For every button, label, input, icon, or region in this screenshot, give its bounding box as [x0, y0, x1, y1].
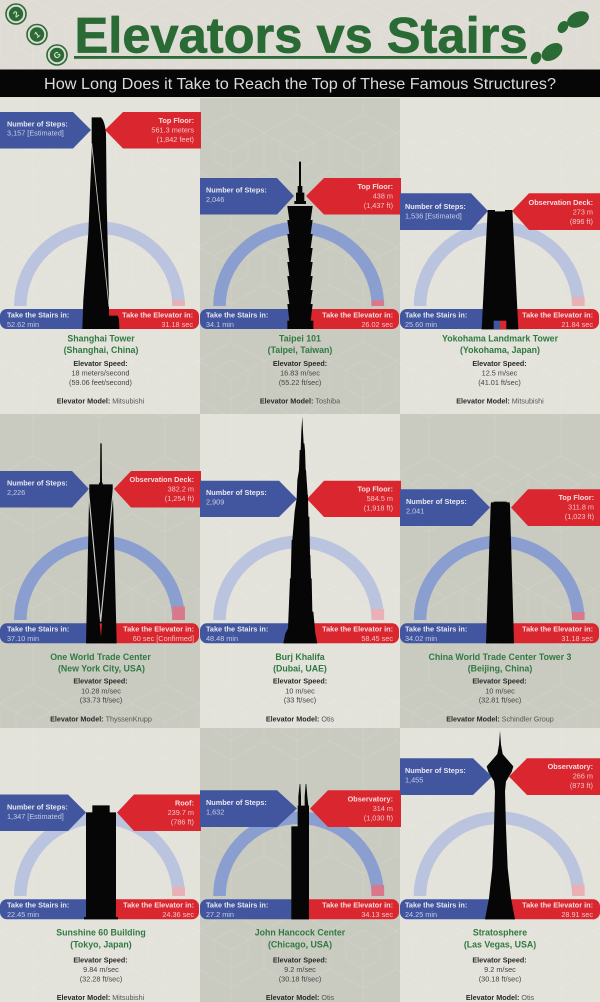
steps callout	[400, 489, 490, 526]
gauge arc	[20, 542, 179, 620]
elevator time bar: 28.91 sec	[561, 910, 593, 919]
stairs time bar	[400, 623, 500, 643]
elevator details: Elevator Speed:	[472, 955, 527, 964]
elevator time bar: Take the Elevator in:	[322, 624, 393, 634]
building name: (Beijing, China)	[468, 664, 532, 674]
building name	[429, 652, 572, 674]
elevator details: 16.83 m/sec	[280, 368, 320, 377]
elevator share of arc	[172, 887, 185, 896]
steps callout: 2,046	[206, 195, 224, 204]
height callout: (873 ft)	[570, 781, 593, 790]
elevator details	[266, 677, 335, 723]
elevator details: 10 m/sec	[285, 686, 315, 695]
elevator details: (59.06 feet/second)	[69, 378, 132, 387]
steps callout: Number of Steps:	[7, 802, 68, 812]
steps callout	[200, 481, 297, 517]
stairs time bar: Take the Stairs in:	[7, 624, 69, 634]
building name: (Tokyo, Japan)	[70, 940, 132, 950]
height callout: Roof:	[175, 798, 194, 808]
gauge arc	[420, 818, 578, 896]
panel: Taipei 101	[200, 162, 401, 406]
stairs time bar: Take the Stairs in:	[206, 900, 268, 910]
elevator details: (33 ft/sec)	[284, 696, 316, 705]
elevator details: Elevator Speed:	[273, 955, 327, 964]
building name: (New York City, USA)	[58, 664, 145, 674]
height callout: Top Floor:	[558, 493, 594, 502]
panel: Yokohama Landmark Tower	[400, 193, 600, 406]
elevator time bar	[100, 899, 199, 919]
elevator details: Elevator Model: Schindler Group	[446, 714, 554, 723]
steps callout: Number of Steps:	[406, 497, 467, 506]
stairs time bar: 22.45 min	[7, 910, 39, 919]
steps callout	[0, 794, 86, 831]
elevator details: 9.2 m/sec	[284, 965, 316, 974]
stairs time bar	[200, 309, 300, 329]
elevator time bar	[500, 623, 599, 643]
height callout: (786 ft)	[171, 818, 194, 826]
elevator time bar: Take the Elevator in:	[123, 624, 194, 634]
icon: floor buttons	[6, 4, 67, 65]
elevator details	[57, 359, 145, 406]
elevator time bar: 24.36 sec	[162, 910, 194, 919]
elevator details: Elevator Model: Otis	[466, 993, 535, 1002]
elevator details: Elevator Speed:	[73, 955, 128, 964]
building silhouette	[82, 117, 119, 329]
height callout	[509, 758, 600, 795]
building name: (Taipei, Taiwan)	[268, 345, 332, 355]
elevator details: 10.28 m/sec	[81, 686, 121, 695]
building silhouette	[485, 731, 515, 919]
icon: footprints	[529, 8, 592, 66]
building name: Yokohama Landmark Tower	[442, 334, 559, 344]
stairs time bar: 34.1 min	[206, 320, 234, 329]
title: Elevators vs Stairs	[74, 8, 528, 64]
steps callout: 1,347 [Estimated]	[7, 812, 64, 821]
stairs time bar: 27.2 min	[206, 910, 234, 919]
elevator details: Elevator Speed:	[273, 677, 327, 686]
height callout	[114, 471, 201, 508]
elevator share of arc	[172, 606, 185, 620]
building name: (Chicago, USA)	[268, 940, 332, 950]
elevator time bar: 60 sec [Confirmed]	[133, 634, 194, 643]
building name	[268, 334, 332, 355]
header background	[0, 0, 600, 100]
panel: China World Trade Center Tower 3	[400, 489, 600, 723]
height callout: (896 ft)	[570, 217, 593, 226]
elevator details: Elevator Speed:	[472, 359, 527, 368]
elevator details	[50, 677, 152, 723]
height callout	[512, 193, 600, 230]
steps callout	[200, 790, 297, 827]
stairs time bar: 37.10 min	[7, 634, 39, 643]
subtitle banner	[0, 70, 600, 97]
building name	[273, 652, 327, 674]
height callout	[117, 794, 201, 831]
building name: (Yokohama, Japan)	[460, 345, 540, 355]
steps callout	[200, 178, 294, 214]
stairs time bar: Take the Stairs in:	[206, 310, 268, 320]
elevator share of arc	[572, 297, 585, 306]
elevator details: Elevator Model: Toshiba	[260, 397, 340, 406]
elevator details: (55.22 ft/sec)	[279, 378, 321, 387]
height callout: Observation Deck:	[529, 198, 593, 207]
building name: Burj Khalifa	[275, 652, 325, 662]
elevator time bar: Take the Elevator in:	[522, 900, 593, 910]
elevator details	[57, 955, 145, 1002]
elevator time bar: 21.84 sec	[561, 320, 593, 329]
gauge arc	[420, 542, 578, 620]
elevator time bar: 34.13 sec	[361, 910, 393, 919]
building name: Stratosphere	[473, 928, 527, 938]
elevator details: Elevator Model: Otis	[266, 714, 335, 723]
elevator details: Elevator Speed:	[73, 359, 128, 368]
elevator details	[260, 359, 340, 406]
icon: floor buttons: 1	[32, 29, 42, 40]
panel: Sunshine 60 Building	[0, 794, 201, 1002]
elevator time bar: Take the Elevator in:	[123, 900, 194, 910]
stairs time bar: 52.62 min	[7, 320, 39, 329]
gauge arc	[220, 542, 378, 620]
height callout	[307, 481, 401, 517]
elevator details	[466, 955, 535, 1002]
stairs time bar	[200, 623, 300, 643]
elevator details	[446, 677, 554, 723]
steps callout: Number of Steps:	[7, 120, 68, 128]
building name	[464, 928, 536, 950]
height callout: Observatory:	[348, 794, 393, 804]
height callout	[511, 489, 600, 526]
elevator time bar	[300, 623, 399, 643]
steps callout	[400, 758, 492, 795]
elevator details: 12.5 m/sec	[482, 368, 518, 377]
elevator details: Elevator Model: Mitsubishi	[57, 397, 145, 406]
height callout: 266 m	[573, 772, 593, 780]
title underline	[74, 56, 527, 59]
height callout: 239.7 m	[168, 808, 194, 817]
elevator details: (30.18 ft/sec)	[279, 974, 321, 983]
building name: One World Trade Center	[50, 652, 151, 662]
building silhouette	[482, 210, 518, 329]
building name: (Las Vegas, USA)	[464, 940, 536, 950]
stairs time bar: 48.48 min	[206, 634, 238, 643]
stairs time bar: Take the Stairs in:	[7, 900, 69, 910]
height callout: 314 m	[373, 804, 393, 813]
building silhouette	[287, 162, 313, 329]
elevator time bar: 26.02 sec	[361, 320, 393, 329]
panel: Shanghai Tower	[0, 112, 201, 406]
subtitle banner: How Long Does it Take to Reach the Top of These Famous Structures?	[44, 76, 556, 93]
building silhouette	[86, 443, 117, 643]
height callout: Top Floor:	[158, 116, 194, 125]
stairs time bar	[0, 309, 100, 329]
elevator details: (30.18 ft/sec)	[479, 974, 521, 983]
steps callout	[0, 112, 91, 148]
height callout: Top Floor:	[357, 484, 393, 494]
panel: John Hancock Center	[200, 784, 401, 1002]
building name: Taipei 101	[279, 334, 321, 344]
elevator time bar	[300, 899, 399, 919]
building silhouette	[486, 502, 514, 643]
steps callout: 2,226	[7, 488, 25, 497]
steps callout	[400, 193, 488, 230]
elevator share of arc	[572, 612, 585, 620]
height callout: Top Floor:	[357, 182, 393, 191]
elevator details: Elevator Speed:	[73, 677, 128, 686]
elevator details: 9.2 m/sec	[484, 965, 516, 974]
height callout: 438 m	[373, 192, 393, 200]
elevator details: 18 meters/second	[71, 368, 130, 377]
building name: Shanghai Tower	[67, 334, 135, 344]
icon: floor buttons: 2	[11, 8, 21, 19]
height callout: (1,918 ft)	[364, 504, 393, 512]
steps callout: Number of Steps:	[206, 488, 267, 497]
steps callout: Number of Steps:	[206, 798, 267, 807]
elevator details: Elevator Model: Otis	[266, 993, 335, 1002]
stairs time bar: 25.60 min	[405, 320, 437, 329]
building name: (Shanghai, China)	[64, 345, 138, 355]
stairs time bar: Take the Stairs in:	[206, 624, 268, 634]
elevator time bar: Take the Elevator in:	[522, 624, 593, 634]
panel: Burj Khalifa	[200, 417, 401, 723]
height callout: 584.5 m	[367, 494, 393, 503]
elevator details: Elevator Model: Mitsubishi	[456, 397, 544, 406]
elevator time bar: Take the Elevator in:	[322, 310, 393, 320]
building name	[50, 652, 151, 674]
building name: Sunshine 60 Building	[56, 928, 146, 938]
stairs time bar	[0, 623, 100, 643]
height callout	[310, 790, 401, 827]
steps callout: 1,455	[405, 775, 423, 784]
elevator details	[456, 359, 544, 406]
building name	[255, 928, 346, 950]
stairs time bar	[0, 899, 100, 919]
stairs time bar: 34.02 min	[405, 634, 437, 643]
gauge arc	[220, 228, 378, 306]
elevator share of arc	[372, 300, 384, 306]
steps callout: 1,536 [Estimated]	[405, 211, 462, 220]
panel: One World Trade Center	[0, 443, 201, 723]
elevator details: (41.01 ft/sec)	[478, 378, 521, 387]
building silhouette	[84, 805, 118, 919]
stairs time bar: 24.25 min	[405, 910, 437, 919]
elevator share of arc	[372, 609, 384, 620]
elevator details: Elevator Model: Mitsubishi	[57, 993, 145, 1002]
building name: China World Trade Center Tower 3	[429, 652, 572, 662]
elevator details	[266, 955, 335, 1002]
elevator details: Elevator Speed:	[273, 359, 327, 368]
height callout: (1,254 ft)	[165, 494, 194, 503]
building name	[64, 334, 138, 355]
elevator details: (32.28 ft/sec)	[80, 974, 122, 983]
height callout: 561.3 meters	[151, 126, 194, 134]
elevator time bar: Take the Elevator in:	[522, 310, 593, 320]
height callout: (1,030 ft)	[364, 814, 393, 822]
elevator time bar	[300, 309, 399, 329]
elevator details: Elevator Speed:	[472, 677, 527, 686]
steps callout: Number of Steps:	[405, 766, 466, 775]
elevator time bar: 58.45 sec	[361, 634, 393, 643]
building name: (Dubai, UAE)	[273, 664, 327, 674]
height callout: Observation Deck:	[130, 475, 194, 484]
elevator share of arc	[572, 884, 585, 896]
gauge arc	[20, 228, 179, 306]
stairs time bar: Take the Stairs in:	[7, 310, 69, 320]
steps callout: Number of Steps:	[405, 202, 466, 211]
steps callout: 2,909	[206, 497, 224, 506]
steps callout: 1,632	[206, 807, 224, 816]
panel: Stratosphere	[400, 731, 600, 1002]
elevator time bar	[100, 623, 199, 643]
building name	[442, 334, 559, 355]
elevator share of arc	[172, 300, 185, 306]
steps callout: 3,157 [Estimated]	[7, 128, 64, 138]
gauge arc	[420, 228, 578, 306]
elevator time bar: Take the Elevator in:	[322, 900, 393, 910]
elevator details: 10 m/sec	[485, 686, 515, 695]
elevator share of arc	[372, 885, 384, 896]
stairs time bar	[400, 899, 500, 919]
height callout	[105, 112, 201, 148]
building name: John Hancock Center	[255, 928, 346, 938]
height callout: (1,842 feet)	[157, 135, 194, 144]
gauge arc	[220, 818, 378, 896]
elevator details: (33.73 ft/sec)	[80, 696, 122, 705]
height callout: 382.2 m	[168, 484, 194, 494]
building silhouette	[283, 417, 317, 643]
steps callout: Number of Steps:	[7, 478, 68, 488]
steps callout: 2,041	[406, 506, 424, 515]
stairs time bar	[400, 309, 500, 329]
height callout: 273 m	[573, 208, 593, 216]
stairs time bar: Take the Stairs in:	[405, 900, 467, 910]
height callout: Observatory:	[548, 762, 593, 771]
icon: floor buttons: G	[51, 49, 63, 61]
elevator time bar	[100, 309, 199, 329]
elevator time bar	[500, 899, 600, 919]
elevator details: 9.84 m/sec	[83, 965, 119, 974]
stairs time bar	[200, 899, 300, 919]
elevator time bar: 31.18 sec	[561, 634, 593, 643]
elevator time bar	[500, 309, 599, 329]
elevator time bar: Take the Elevator in:	[122, 310, 193, 320]
height callout: (1,023 ft)	[565, 512, 594, 521]
height callout	[306, 178, 401, 214]
building name	[56, 928, 146, 950]
steps callout: Number of Steps:	[206, 186, 267, 194]
gauge arc	[20, 818, 179, 896]
elevator details: (32.81 ft/sec)	[479, 696, 521, 705]
elevator time bar: 31.18 sec	[161, 320, 193, 329]
stairs time bar: Take the Stairs in:	[405, 310, 467, 320]
elevator details: Elevator Model: ThyssenKrupp	[50, 714, 152, 723]
height callout: (1,437 ft)	[364, 201, 393, 210]
height callout: 311.8 m	[568, 502, 594, 512]
building silhouette	[291, 784, 309, 919]
stairs time bar: Take the Stairs in:	[405, 624, 467, 634]
steps callout	[0, 471, 89, 508]
